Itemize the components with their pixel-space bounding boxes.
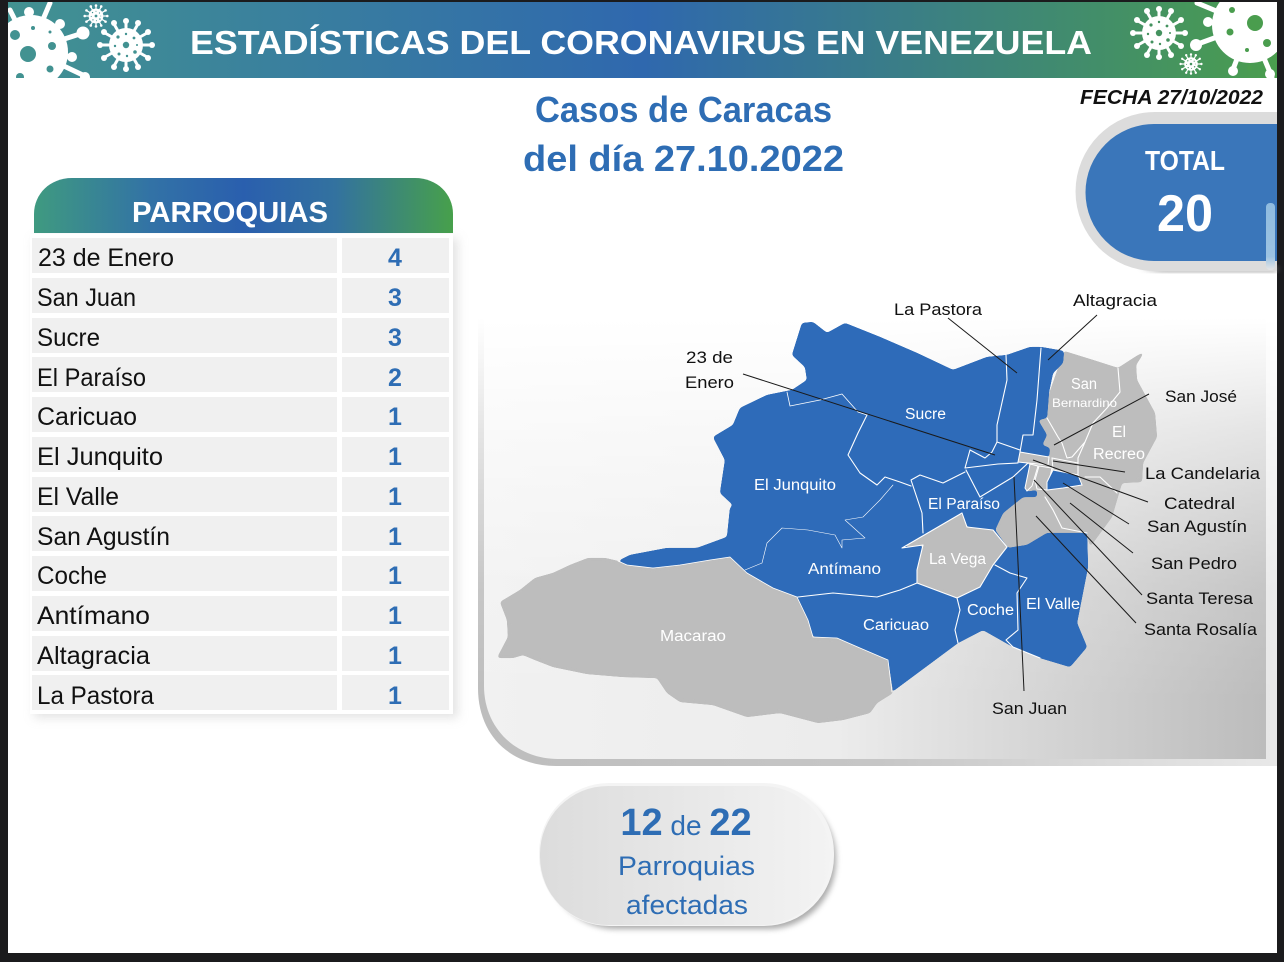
map: central parishes bbox=[1018, 452, 1078, 491]
parish names: Caricuao bbox=[37, 403, 137, 431]
map labels: black: San José bbox=[1165, 387, 1237, 406]
map: parish boundaries bbox=[618, 348, 1120, 692]
map labels: white: Coche bbox=[967, 602, 1014, 619]
callout: parishes affected bbox=[539, 783, 836, 929]
map labels: white: Antímano bbox=[808, 561, 881, 578]
map labels: white: Sucre bbox=[905, 406, 946, 423]
parish names: El Junquito bbox=[37, 443, 163, 471]
parish counts: 1 bbox=[388, 523, 402, 551]
parish counts: 1 bbox=[388, 642, 402, 670]
parish counts: 2 bbox=[388, 364, 402, 392]
map labels: white: El Junquito bbox=[754, 477, 836, 494]
parish names: El Paraíso bbox=[37, 364, 146, 392]
map labels: black: Santa Rosalía bbox=[1144, 620, 1258, 639]
parish names: Antímano bbox=[37, 602, 150, 630]
table header: PARROQUIAS bbox=[132, 197, 328, 229]
parish counts: 1 bbox=[388, 602, 402, 630]
callout text bbox=[618, 851, 755, 920]
date: FECHA 27/10/2022 bbox=[1080, 87, 1263, 109]
map labels: white: El bbox=[1112, 424, 1126, 441]
parish counts: 1 bbox=[388, 562, 402, 590]
parish names: 23 de Enero bbox=[38, 244, 174, 272]
parish names: Altagracia bbox=[37, 642, 150, 670]
parish counts: 1 bbox=[388, 483, 402, 511]
map labels: black: San Agustín bbox=[1147, 517, 1247, 536]
map labels: black: Catedral bbox=[1164, 494, 1235, 513]
map labels: white: Bernardino bbox=[1052, 396, 1117, 410]
table rows bbox=[32, 238, 449, 710]
map: unaffected east parishes bbox=[995, 351, 1157, 548]
main heading: del día 27.10.2022 bbox=[523, 138, 844, 179]
panel: parroquias table bbox=[30, 178, 458, 718]
total label: TOTAL bbox=[1145, 145, 1225, 176]
map: La Vega bbox=[902, 513, 1007, 598]
map labels: white: Recreo bbox=[1093, 446, 1145, 463]
parish names: El Valle bbox=[37, 483, 119, 511]
map labels: white: Caricuao bbox=[863, 617, 929, 634]
parish names: Coche bbox=[37, 562, 107, 590]
total badge bbox=[1076, 112, 1277, 272]
icon: large virus right bbox=[1190, 2, 1277, 78]
map labels: black: Altagracia bbox=[1073, 291, 1158, 310]
callout count: 12 de 22 bbox=[620, 802, 752, 844]
parish counts: 1 bbox=[388, 682, 402, 710]
parish counts: 4 bbox=[388, 244, 402, 272]
icon: small viruses left bbox=[83, 4, 155, 72]
map labels: black: 23 de bbox=[686, 348, 733, 367]
map of Caracas parishes bbox=[497, 291, 1261, 723]
parish counts bbox=[388, 244, 402, 710]
callout text: afectadas bbox=[626, 890, 748, 920]
parish names: San Agustín bbox=[37, 523, 170, 551]
map labels: white bbox=[660, 376, 1145, 645]
panel: map background bbox=[478, 318, 1277, 766]
map leader lines bbox=[743, 315, 1149, 691]
parish counts: 1 bbox=[388, 443, 402, 471]
map labels: black: San Pedro bbox=[1151, 554, 1237, 573]
main heading: Casos de Caracas bbox=[535, 89, 832, 130]
parish counts: 1 bbox=[388, 403, 402, 431]
main heading bbox=[523, 89, 844, 179]
header banner bbox=[8, 2, 1277, 78]
parish counts: 3 bbox=[388, 284, 402, 312]
map labels: white: El Paraíso bbox=[928, 496, 1000, 513]
map: affected parishes bbox=[618, 322, 1088, 692]
icon: large virus left bbox=[8, 2, 90, 78]
callout text: Parroquias bbox=[618, 851, 755, 881]
map labels: black bbox=[685, 291, 1261, 718]
parish names: Sucre bbox=[37, 324, 100, 352]
map labels: white: La Vega bbox=[929, 551, 986, 568]
map labels: white: El Valle bbox=[1026, 596, 1080, 613]
total value: 20 bbox=[1157, 185, 1213, 243]
parish counts: 3 bbox=[388, 324, 402, 352]
map labels: black: La Pastora bbox=[894, 300, 983, 319]
map labels: white: San bbox=[1071, 376, 1097, 393]
map labels: black: Santa Teresa bbox=[1146, 589, 1254, 608]
map labels: black: Enero bbox=[685, 373, 734, 392]
table header bbox=[34, 178, 453, 233]
map labels: white: Macarao bbox=[660, 628, 726, 645]
map labels: black: La Candelaria bbox=[1145, 464, 1261, 483]
parish names: La Pastora bbox=[37, 682, 154, 710]
map labels: black: San Juan bbox=[992, 699, 1067, 718]
map: San Agustín bbox=[1047, 470, 1082, 490]
parish names bbox=[37, 244, 174, 710]
icon: small viruses right bbox=[1130, 6, 1203, 75]
banner title: ESTADÍSTICAS DEL CORONAVIRUS EN VENEZUELA bbox=[190, 24, 1092, 62]
map: Macarao bbox=[497, 557, 893, 723]
parish names: San Juan bbox=[37, 284, 136, 312]
